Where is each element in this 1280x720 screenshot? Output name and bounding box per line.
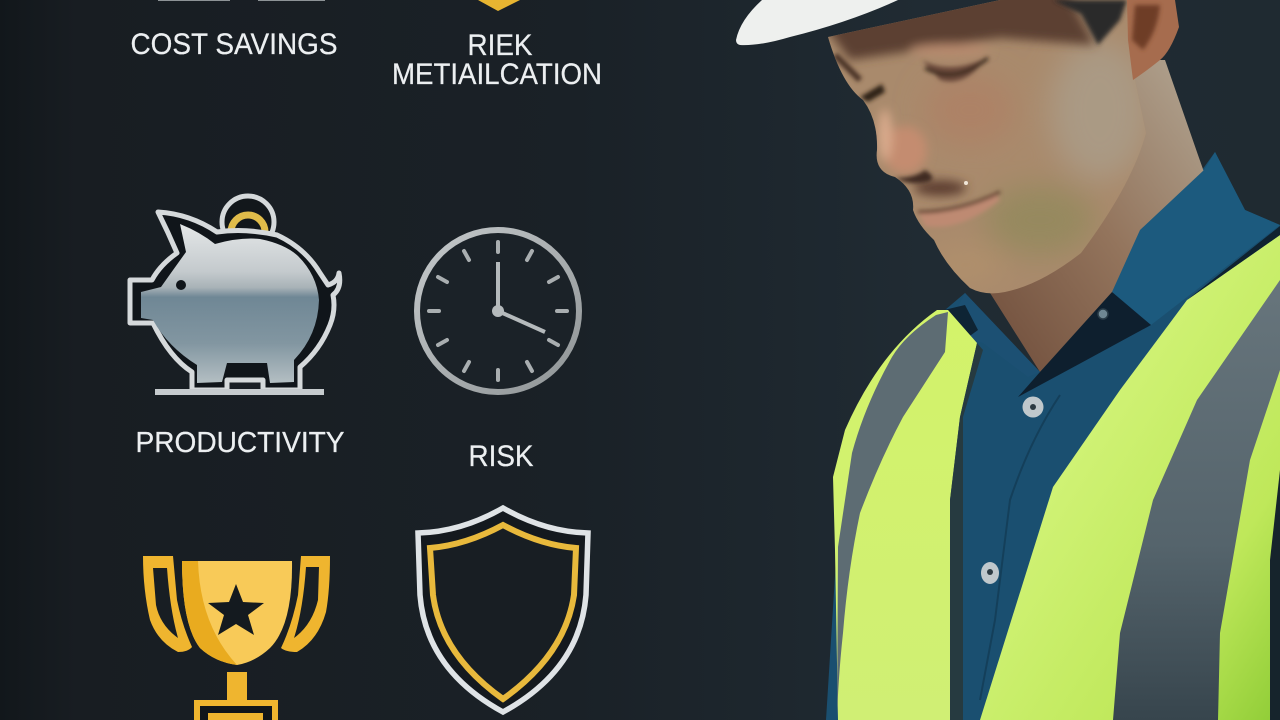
icon: piggy bank (130, 196, 340, 395)
photo: worker in hard hat and hi-vis vest (736, 0, 1280, 720)
collar button (1098, 309, 1108, 319)
label: risk mitigation (392, 29, 602, 91)
left collar tip (938, 305, 978, 354)
label: risk: RISK (468, 440, 534, 473)
vest dark trim (950, 343, 983, 720)
icon: shield (418, 508, 588, 712)
label: productivity: PRODUCTIVITY (136, 427, 344, 459)
label: risk mitigation: RIEK (468, 29, 532, 62)
hair (1053, 0, 1127, 45)
vest dark upper trim (1187, 226, 1280, 300)
shirt buttons (981, 396, 1044, 584)
face (820, 0, 1160, 300)
vest right band (980, 235, 1280, 720)
shirt (826, 152, 1280, 720)
ear (1127, 0, 1179, 80)
vest right reflective (1113, 280, 1280, 720)
vest left reflective (837, 312, 948, 720)
icon: clock (417, 230, 579, 392)
collar right (1112, 152, 1280, 325)
mole highlight (964, 181, 968, 185)
icon: shield fragment (478, 0, 520, 11)
icon: cost savings fragment (158, 0, 325, 1)
label: risk mitigation: METIAILCATION (392, 58, 602, 91)
dark under collar (1018, 292, 1151, 397)
collar left (945, 293, 1040, 377)
vest left outer strip (833, 310, 977, 720)
icon: trophy (143, 556, 330, 720)
hard hat (736, 0, 898, 45)
vest dark edge (1270, 470, 1280, 720)
neck (985, 60, 1204, 372)
shirt placket (980, 395, 1060, 700)
label: cost savings: COST SAVINGS (130, 28, 338, 61)
